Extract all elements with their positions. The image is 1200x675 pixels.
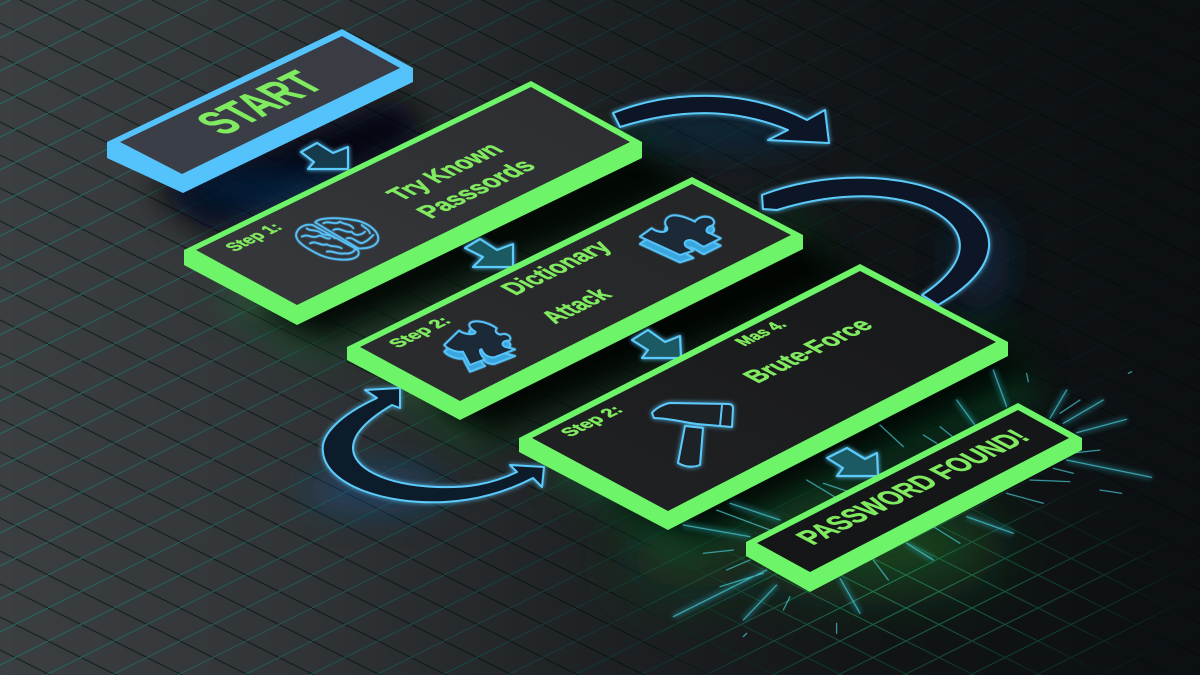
- panel: step 3 brute force: [519, 264, 1008, 530]
- arrow: step 2 to step 3: [632, 330, 681, 358]
- heading: start: START: [184, 65, 337, 141]
- panel: step 1: Passsords: [410, 156, 543, 222]
- arrow: large right loop: [762, 178, 989, 305]
- arrow: step 1 to step 2: [465, 239, 513, 267]
- arrow: top curved arrow: [613, 96, 829, 143]
- icon: hammer: [652, 403, 733, 467]
- glow: green bloom under burst: [620, 503, 1000, 590]
- arrow: step 3 to password found: [827, 448, 878, 476]
- panel: password found: [746, 403, 1082, 592]
- icon: puzzle piece left: [444, 321, 515, 372]
- spark burst: [673, 370, 1152, 637]
- text: password found: PASSWORD FOUND!: [788, 425, 1037, 549]
- panel: start: [107, 29, 413, 193]
- icon: brain: [296, 218, 378, 260]
- label: step 2: Step 2:: [385, 315, 456, 350]
- text: try known passwords: Try Known: [380, 139, 511, 204]
- arrow: lower-left curved return arrow: [323, 388, 544, 502]
- label: step 3: Step 2:: [557, 404, 628, 439]
- arrow: start to step 1: [301, 143, 348, 169]
- panel: step 2 dictionary attack: [347, 177, 803, 420]
- text: dictionary: Dictionary: [494, 237, 618, 299]
- text: mas 4: Mas 4.: [731, 318, 792, 349]
- icon: puzzle piece right: [640, 215, 721, 262]
- text: attack: Attack: [534, 285, 619, 327]
- text: brute-force: Brute-Force: [737, 315, 880, 387]
- panel shadows: [150, 95, 1040, 560]
- panel: step 1: [184, 81, 642, 325]
- label: step 1: Step 1:: [221, 221, 287, 254]
